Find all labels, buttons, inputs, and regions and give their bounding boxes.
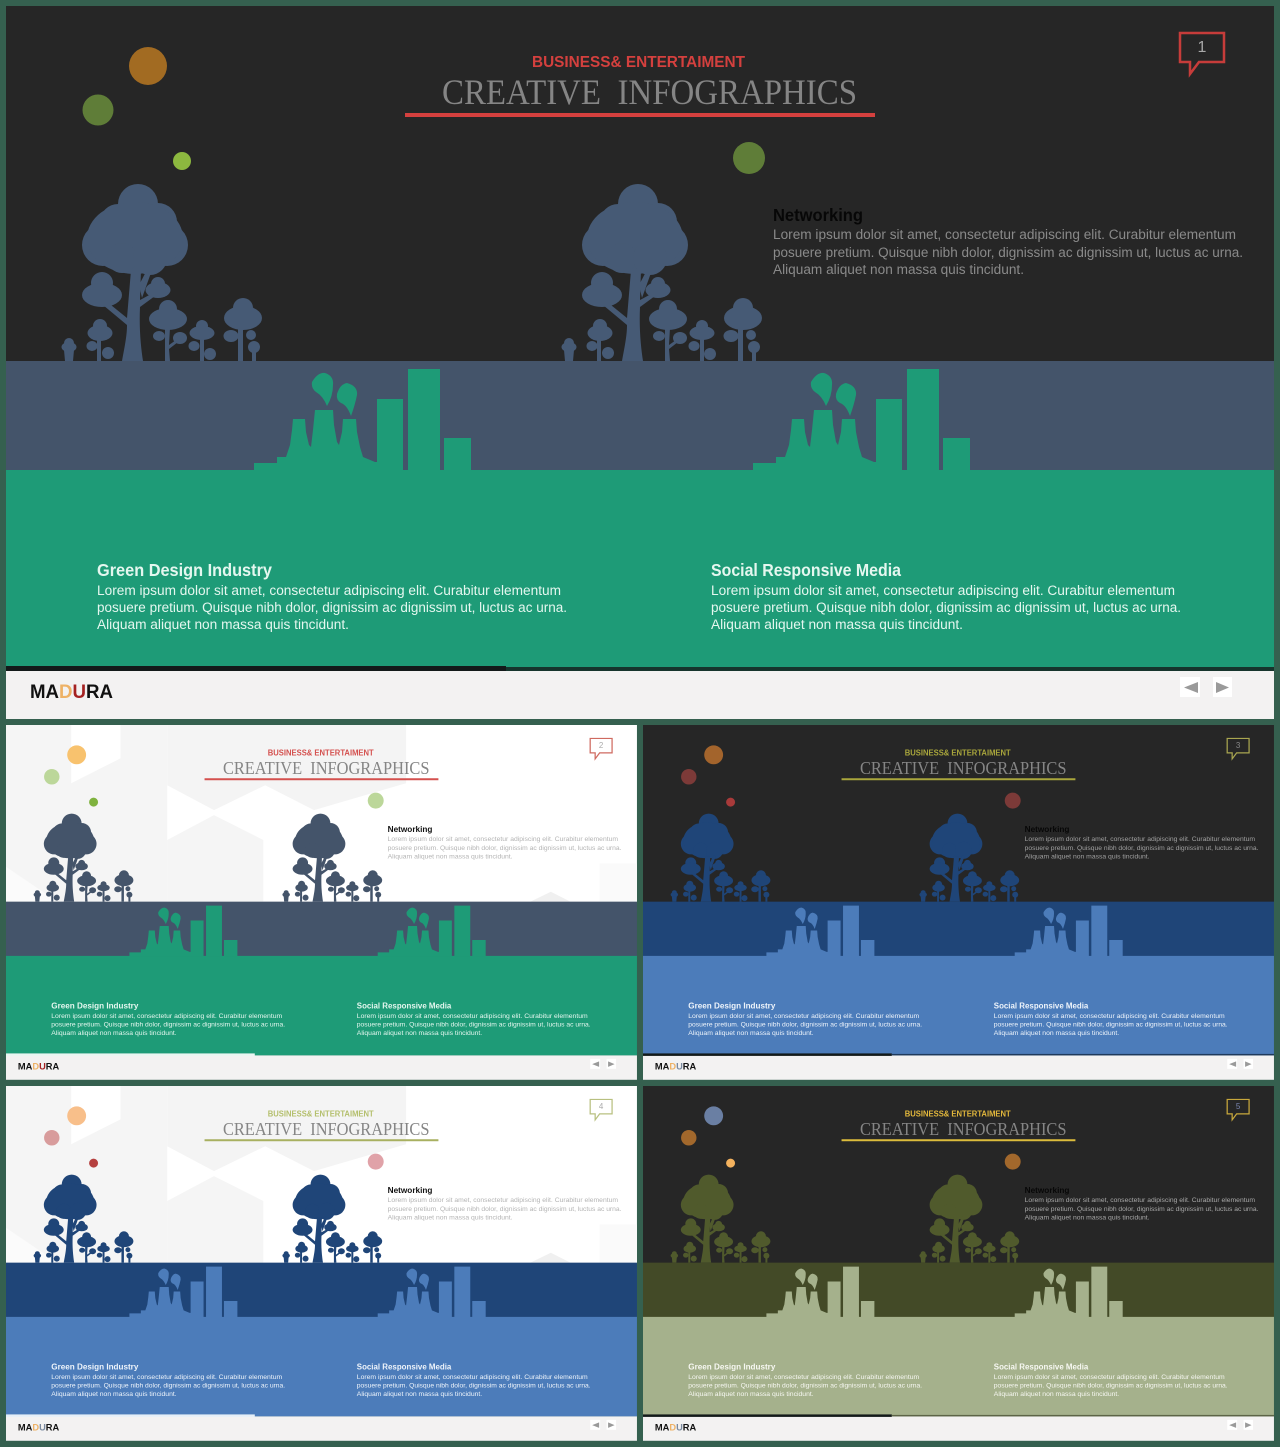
text block: social responsive media: posuere pretium. Quisque nibh dolor, dignissim ac dignissim ut, luctus ac urna. (357, 1383, 591, 1390)
text block: green design industry: Aliquam aliquet non massa quis tincidunt. (97, 617, 349, 632)
text block: networking: Networking (1025, 1185, 1069, 1195)
text block: social responsive media: Social Responsive Media (357, 1362, 451, 1372)
text block: green design industry: Aliquam aliquet non massa quis tincidunt. (51, 1391, 177, 1398)
text block: networking: Lorem ipsum dolor sit amet, consectetur adipiscing elit. Curabitur elementum (388, 836, 618, 843)
icon: speech bubble with slide number: 5 (1236, 1102, 1241, 1111)
lower panel (6, 1317, 637, 1416)
navigation buttons (1180, 677, 1232, 697)
navigation buttons (1227, 1420, 1253, 1430)
text block: social responsive media: Lorem ipsum dolor sit amet, consectetur adipiscing elit. Curabitur elementum (994, 1374, 1225, 1381)
tree silhouettes (671, 1175, 1019, 1263)
footer bar (6, 1053, 637, 1080)
text block: networking: Aliquam aliquet non massa quis tincidunt. (1025, 853, 1150, 860)
text block: social responsive media: Lorem ipsum dolor sit amet, consectetur adipiscing elit. Curabitur elementum (357, 1374, 588, 1381)
text block: networking (388, 824, 622, 860)
decorative circles (44, 745, 384, 809)
panel: slide 3 dark blue (643, 725, 1274, 1080)
text block: social responsive media: Social Responsive Media (357, 1001, 451, 1011)
navigation buttons (590, 1420, 616, 1430)
text block: networking (1025, 1185, 1259, 1221)
lower panel (6, 470, 1274, 670)
footer bar (643, 1414, 1274, 1441)
panel: slide 5 dark olive (643, 1086, 1274, 1441)
text block: social responsive media: Aliquam aliquet non massa quis tincidunt. (994, 1030, 1119, 1037)
text block: networking: Aliquam aliquet non massa quis tincidunt. (388, 853, 513, 860)
title: CREATIVE INFOGRAPHICS (223, 758, 429, 778)
text block: green design industry (51, 1001, 285, 1037)
panel: slide 1 main (6, 6, 1274, 719)
heading: business and entertainment: BUSINESS& ENTERTAIMENT (532, 54, 745, 71)
text block: green design industry: posuere pretium. Quisque nibh dolor, dignissim ac dignissim ut, luctus ac urna. (688, 1022, 922, 1029)
icon: speech bubble with slide number (590, 1099, 612, 1120)
heading: business and entertainment: BUSINESS& ENTERTAIMENT (905, 748, 1011, 757)
middle band (6, 361, 1274, 471)
icon: speech bubble with slide number (1227, 1099, 1249, 1120)
text block: networking: Aliquam aliquet non massa quis tincidunt. (388, 1214, 513, 1221)
text block: networking: Networking (388, 1185, 432, 1195)
logo: MADURA (30, 682, 113, 703)
text block: networking: Lorem ipsum dolor sit amet, consectetur adipiscing elit. Curabitur elementum (388, 1197, 618, 1204)
text block: networking: posuere pretium. Quisque nibh dolor, dignissim ac dignissim ut, luctus ac urna. (1025, 1206, 1259, 1213)
text block: networking: posuere pretium. Quisque nibh dolor, dignissim ac dignissim ut, luctus ac urna. (773, 245, 1243, 260)
text block: green design industry: Green Design Industry (51, 1362, 139, 1372)
icon: speech bubble with slide number (590, 738, 612, 759)
text block: social responsive media: Social Responsive Media (994, 1362, 1088, 1372)
decorative circles (681, 745, 1021, 809)
text block: green design industry: Lorem ipsum dolor sit amet, consectetur adipiscing elit. Curabitur elementum (97, 583, 561, 598)
title: CREATIVE INFOGRAPHICS (223, 1119, 429, 1139)
text block: social responsive media (711, 560, 1181, 632)
factory silhouettes (254, 369, 970, 471)
icon: speech bubble with slide number: 4 (599, 1102, 604, 1111)
factory silhouettes (129, 1267, 486, 1317)
navigation buttons (1227, 1059, 1253, 1069)
text block: green design industry: Green Design Industry (97, 560, 272, 580)
text block: green design industry: posuere pretium. Quisque nibh dolor, dignissim ac dignissim ut, luctus ac urna. (51, 1022, 285, 1029)
text block: green design industry (97, 560, 567, 632)
icon: speech bubble with slide number (1180, 33, 1224, 74)
decorative circles (681, 1106, 1021, 1170)
slide background (643, 725, 1274, 902)
text block: networking: posuere pretium. Quisque nibh dolor, dignissim ac dignissim ut, luctus ac urna. (388, 845, 622, 852)
text block: networking: Networking (388, 824, 432, 834)
text block: social responsive media (994, 1362, 1228, 1398)
text block: social responsive media: posuere pretium. Quisque nibh dolor, dignissim ac dignissim ut, luctus ac urna. (357, 1022, 591, 1029)
text block: social responsive media: Social Responsive Media (994, 1001, 1088, 1011)
text block: green design industry: Green Design Industry (51, 1001, 139, 1011)
text block: social responsive media: Lorem ipsum dolor sit amet, consectetur adipiscing elit. Curabitur elementum (357, 1013, 588, 1020)
title underline (842, 778, 1075, 780)
logo: MADURA (655, 1422, 696, 1433)
text block: green design industry: Lorem ipsum dolor sit amet, consectetur adipiscing elit. Curabitur elementum (51, 1374, 283, 1381)
text block: social responsive media: Social Responsive Media (711, 560, 901, 580)
middle band (643, 902, 1274, 956)
text block: social responsive media: posuere pretium. Quisque nibh dolor, dignissim ac dignissim ut, luctus ac urna. (994, 1383, 1228, 1390)
text block: green design industry: Aliquam aliquet non massa quis tincidunt. (688, 1030, 814, 1037)
heading: business and entertainment: BUSINESS& ENTERTAIMENT (268, 1109, 374, 1118)
factory silhouettes (766, 1267, 1123, 1317)
navigation buttons (590, 1059, 616, 1069)
text block: networking: Lorem ipsum dolor sit amet, consectetur adipiscing elit. Curabitur elementum (1025, 836, 1255, 843)
text block: networking: Aliquam aliquet non massa quis tincidunt. (1025, 1214, 1150, 1221)
lower panel (643, 956, 1274, 1055)
text block: green design industry: posuere pretium. Quisque nibh dolor, dignissim ac dignissim ut, luctus ac urna. (97, 600, 567, 615)
text block: social responsive media: Lorem ipsum dolor sit amet, consectetur adipiscing elit. Curabitur elementum (711, 583, 1175, 598)
title: CREATIVE INFOGRAPHICS (860, 1119, 1066, 1139)
icon: speech bubble with slide number: 1 (1198, 39, 1207, 56)
title underline (205, 1139, 438, 1141)
footer bar (6, 666, 1274, 719)
text block: green design industry: Aliquam aliquet non massa quis tincidunt. (688, 1391, 814, 1398)
title: CREATIVE INFOGRAPHICS (442, 72, 857, 112)
text block: green design industry: posuere pretium. Quisque nibh dolor, dignissim ac dignissim ut, luctus ac urna. (688, 1383, 922, 1390)
tree silhouettes (34, 1175, 382, 1263)
text block: green design industry (688, 1001, 922, 1037)
tree silhouettes (34, 814, 382, 902)
text block: green design industry (51, 1362, 285, 1398)
text block: green design industry: Lorem ipsum dolor sit amet, consectetur adipiscing elit. Curabitur elementum (51, 1013, 283, 1020)
text block: networking: posuere pretium. Quisque nibh dolor, dignissim ac dignissim ut, luctus ac urna. (388, 1206, 622, 1213)
text block: social responsive media: Lorem ipsum dolor sit amet, consectetur adipiscing elit. Curabitur elementum (994, 1013, 1225, 1020)
lower panel (6, 956, 637, 1055)
lower panel (643, 1317, 1274, 1416)
heading: business and entertainment: BUSINESS& ENTERTAIMENT (905, 1109, 1011, 1118)
title: CREATIVE INFOGRAPHICS (860, 758, 1066, 778)
icon: speech bubble with slide number: 2 (599, 741, 604, 750)
logo: MADURA (655, 1061, 696, 1072)
title underline (405, 113, 875, 117)
footer bar (643, 1053, 1274, 1080)
icon: speech bubble with slide number (1227, 738, 1249, 759)
title underline (205, 778, 438, 780)
middle band (6, 1263, 637, 1317)
text block: social responsive media: Aliquam aliquet non massa quis tincidunt. (357, 1030, 482, 1037)
text block: green design industry: Aliquam aliquet non massa quis tincidunt. (51, 1030, 177, 1037)
text block: social responsive media (357, 1001, 591, 1037)
factory silhouettes (766, 906, 1123, 956)
text block: networking: Networking (1025, 824, 1069, 834)
text block: green design industry: posuere pretium. Quisque nibh dolor, dignissim ac dignissim ut, luctus ac urna. (51, 1383, 285, 1390)
slide background (643, 1086, 1274, 1263)
hexagon background (6, 725, 637, 902)
middle band (643, 1263, 1274, 1317)
text block: networking (1025, 824, 1259, 860)
text block: green design industry: Green Design Industry (688, 1001, 776, 1011)
text block: networking: Lorem ipsum dolor sit amet, consectetur adipiscing elit. Curabitur elementum (773, 227, 1236, 242)
text block: networking: Lorem ipsum dolor sit amet, consectetur adipiscing elit. Curabitur elementum (1025, 1197, 1255, 1204)
text block: green design industry (688, 1362, 922, 1398)
text block: social responsive media: posuere pretium. Quisque nibh dolor, dignissim ac dignissim ut, luctus ac urna. (711, 600, 1181, 615)
tree silhouettes (671, 814, 1019, 902)
text block: social responsive media: Aliquam aliquet non massa quis tincidunt. (357, 1391, 482, 1398)
decorative circles (44, 1106, 384, 1170)
hexagon background (6, 1086, 637, 1263)
text block: green design industry: Green Design Industry (688, 1362, 776, 1372)
tree silhouettes (62, 184, 762, 361)
text block: social responsive media: posuere pretium. Quisque nibh dolor, dignissim ac dignissim ut, luctus ac urna. (994, 1022, 1228, 1029)
logo: MADURA (18, 1422, 59, 1433)
text block: green design industry: Lorem ipsum dolor sit amet, consectetur adipiscing elit. Curabitur elementum (688, 1013, 920, 1020)
text block: networking: posuere pretium. Quisque nibh dolor, dignissim ac dignissim ut, luctus ac urna. (1025, 845, 1259, 852)
factory silhouettes (129, 906, 486, 956)
title underline (842, 1139, 1075, 1141)
text block: networking (388, 1185, 622, 1221)
text block: social responsive media (357, 1362, 591, 1398)
heading: business and entertainment: BUSINESS& ENTERTAIMENT (268, 748, 374, 757)
middle band (6, 902, 637, 956)
panel: slide 2 light green (6, 725, 637, 1080)
decorative circles (82, 47, 765, 174)
text block: social responsive media: Aliquam aliquet non massa quis tincidunt. (994, 1391, 1119, 1398)
text block: networking (773, 205, 1243, 277)
footer bar (6, 1414, 637, 1441)
logo: MADURA (18, 1061, 59, 1072)
icon: speech bubble with slide number: 3 (1236, 741, 1241, 750)
text block: social responsive media: Aliquam aliquet non massa quis tincidunt. (711, 617, 963, 632)
text block: networking: Networking (773, 205, 863, 225)
text block: networking: Aliquam aliquet non massa quis tincidunt. (773, 262, 1024, 277)
text block: social responsive media (994, 1001, 1228, 1037)
panel: slide 4 light blue (6, 1086, 637, 1441)
text block: green design industry: Lorem ipsum dolor sit amet, consectetur adipiscing elit. Curabitur elementum (688, 1374, 920, 1381)
